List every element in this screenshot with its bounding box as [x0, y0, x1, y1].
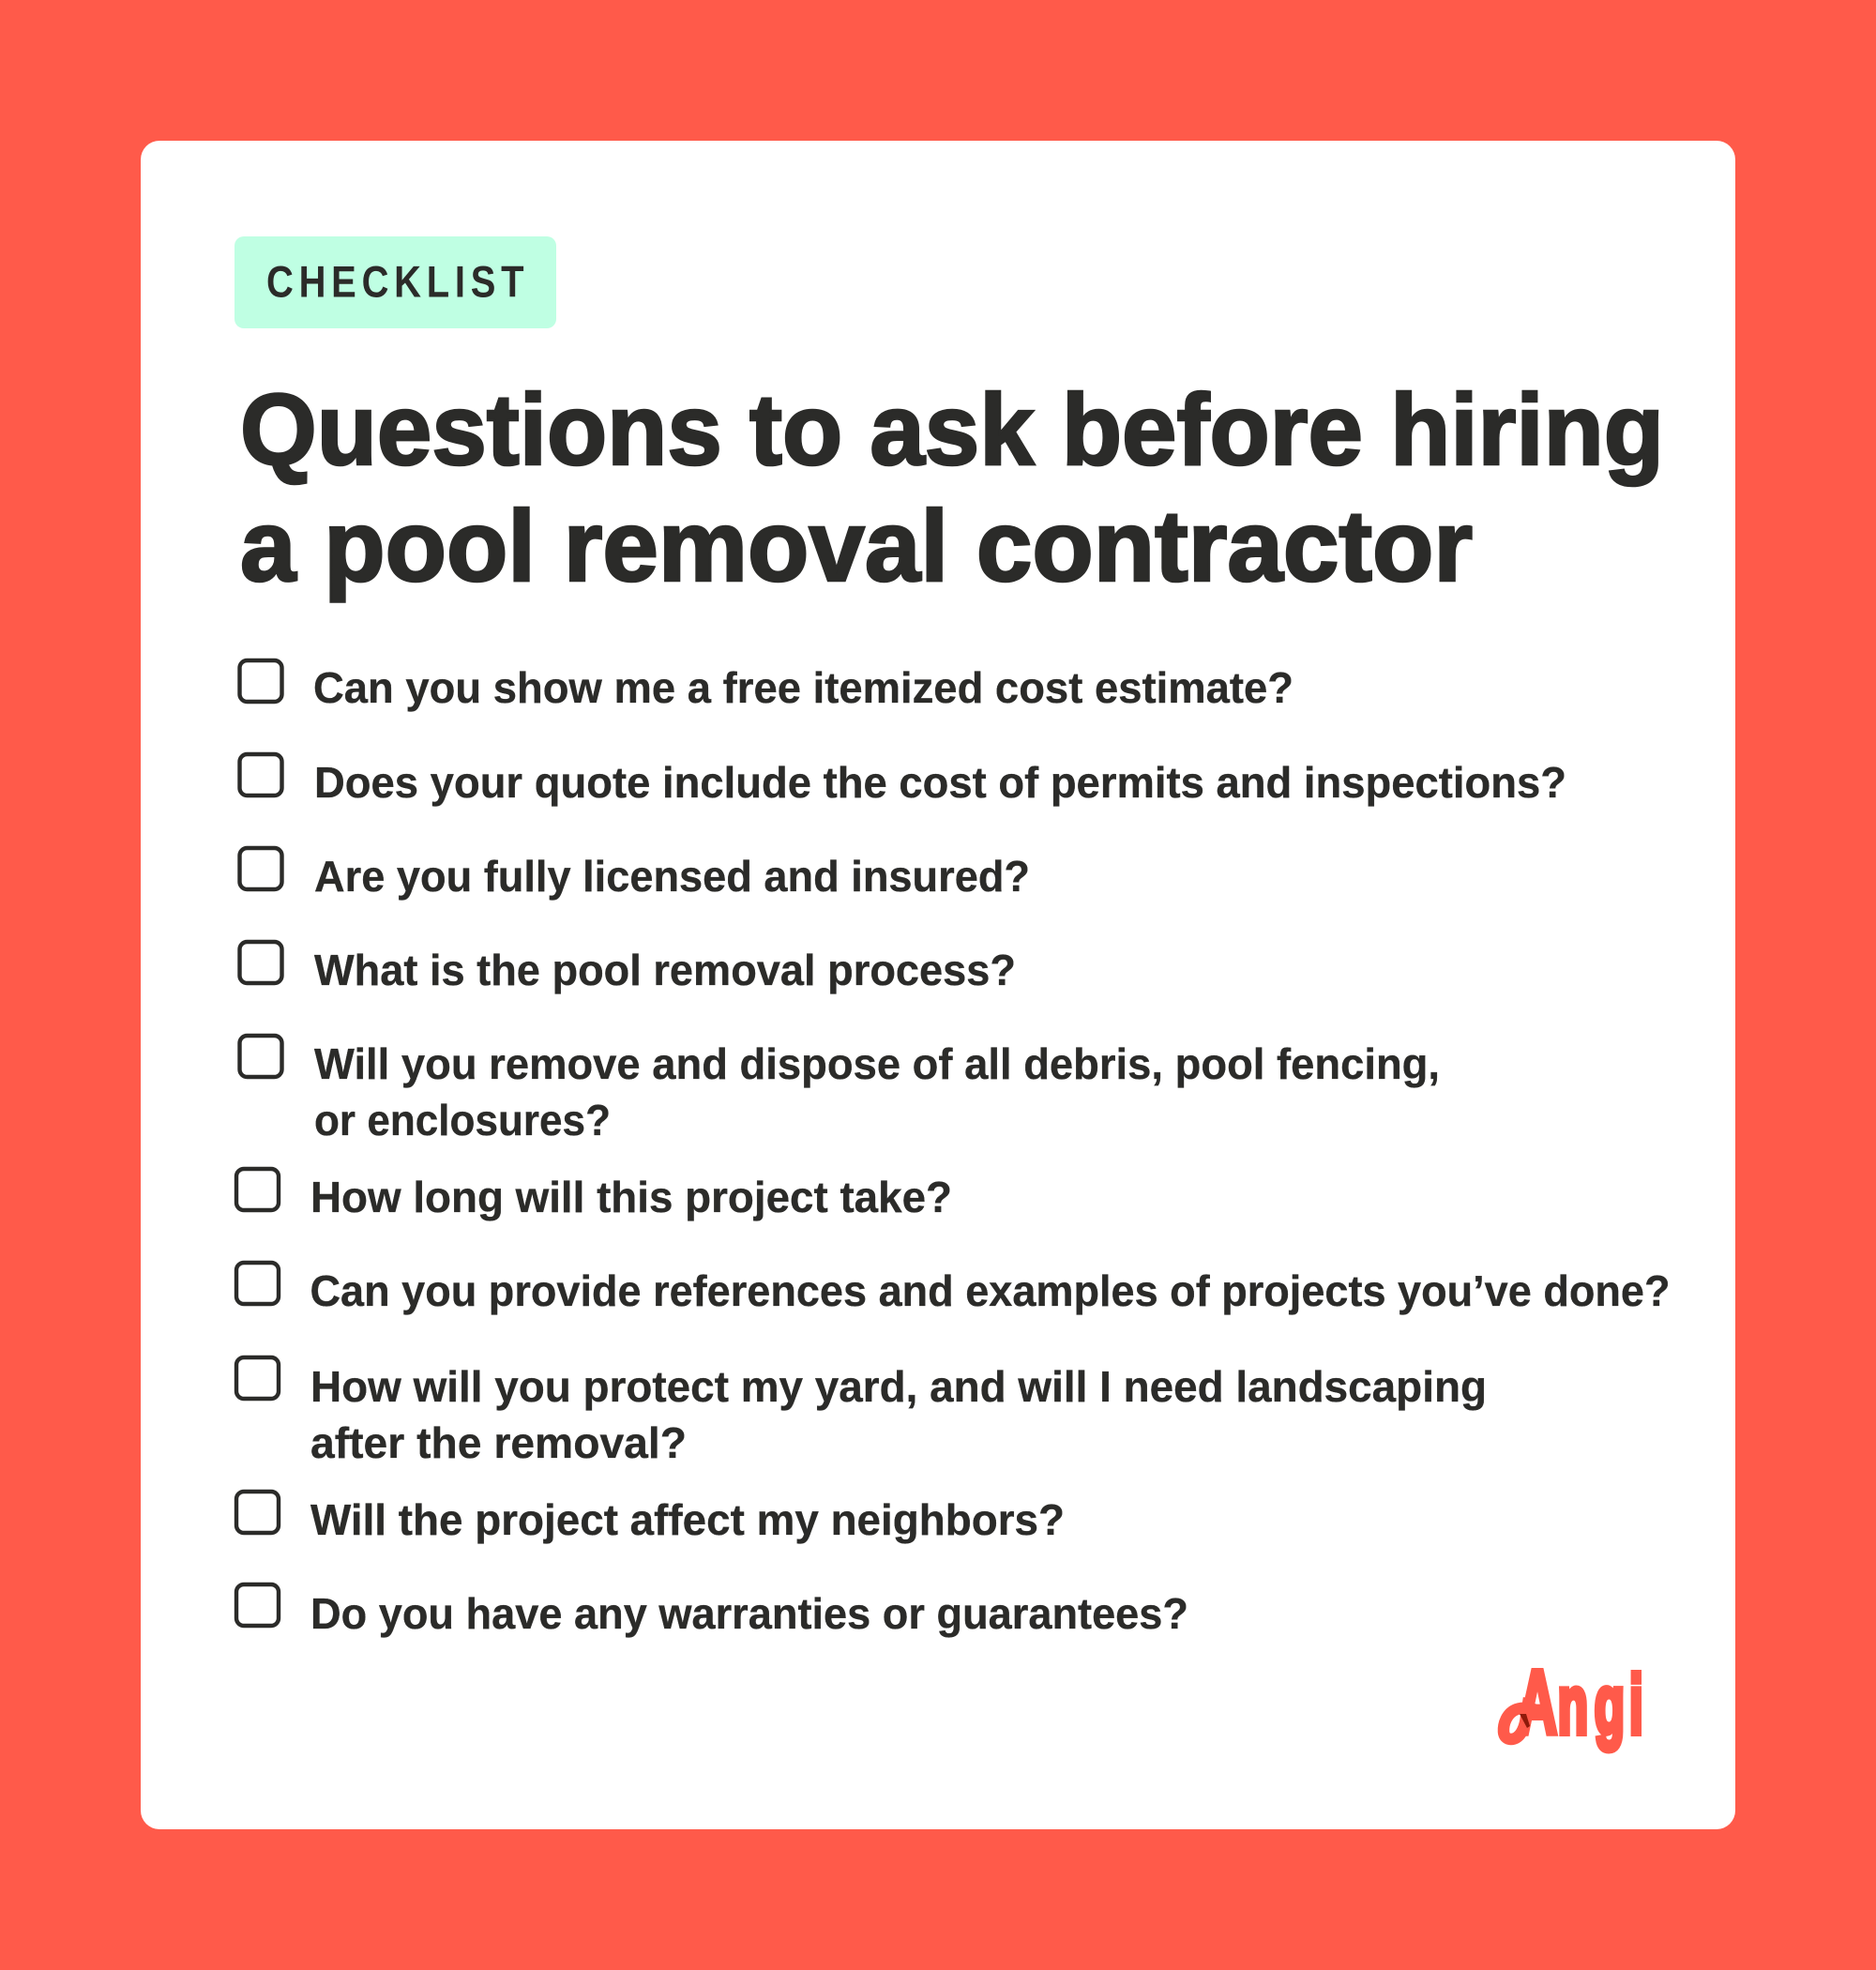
checklist item 5: or enclosures? [314, 1096, 611, 1144]
badge: CHECKLIST [234, 236, 556, 328]
title: a pool removal contractor [240, 489, 1473, 602]
checklist item 6: How long will this project take? [310, 1173, 952, 1221]
checklist item 7: Can you provide references and examples of projects you’ve done? [310, 1266, 1670, 1315]
checklist item 5 [240, 1036, 1440, 1144]
logo: Angi: Angi [1518, 1651, 1643, 1752]
checklist item 2: Does your quote include the cost of permits and inspections? [314, 758, 1566, 807]
title [240, 372, 1664, 602]
checklist item 5: Will you remove and dispose of all debris, pool fencing, [314, 1039, 1440, 1088]
checklist item 4: What is the pool removal process? [314, 946, 1016, 994]
checklist item 8: after the removal? [310, 1418, 687, 1467]
checklist item 9: Will the project affect my neighbors? [310, 1495, 1065, 1544]
panel: checklist card [141, 141, 1735, 1829]
title: Questions to ask before hiring [240, 372, 1664, 486]
checklist item 3: Are you fully licensed and insured? [314, 852, 1030, 901]
badge: CHECKLIST: CHECKLIST [266, 259, 524, 307]
checklist item 1: Can you show me a free itemized cost estimate? [313, 663, 1294, 712]
checklist item 8: How will you protect my yard, and will I need landscaping [310, 1362, 1487, 1411]
checklist item 8 [236, 1357, 1487, 1467]
checklist item 10: Do you have any warranties or guarantees? [310, 1589, 1188, 1638]
